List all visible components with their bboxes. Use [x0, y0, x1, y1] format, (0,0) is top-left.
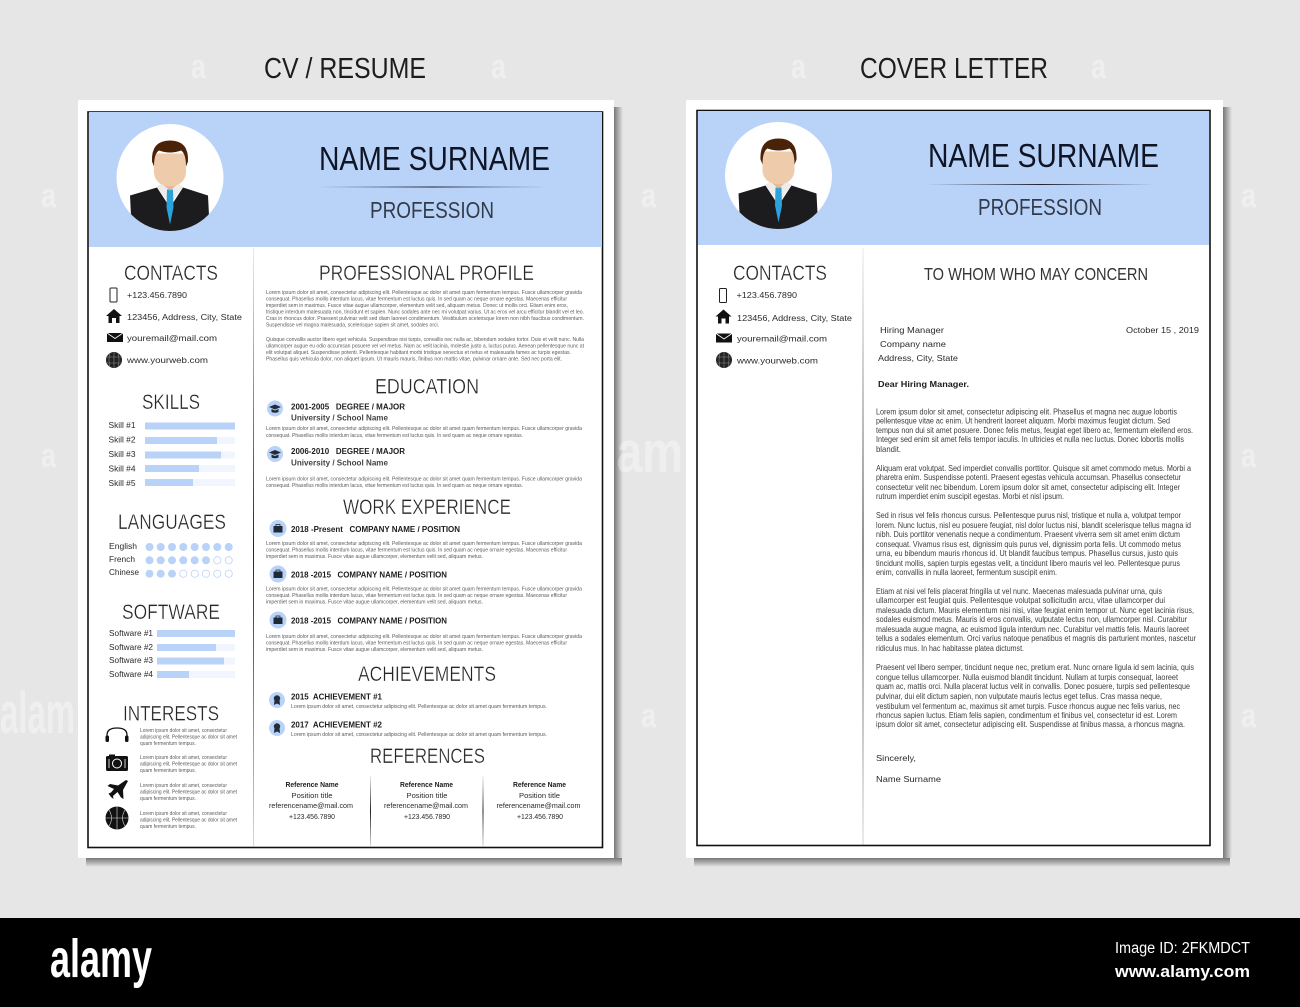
section: references: Position title — [292, 791, 332, 800]
interest descriptions: Lorem ipsum dolor sit amet, consectetur — [140, 755, 227, 761]
watermark: a — [1241, 437, 1257, 475]
section: professional profile: Cras in rhoncus dolor. Praesent pulvinar velit sed diam laoreet condimentum. Vestibulum scelerisque lorem non nibh faucibus condimentum. — [266, 316, 584, 322]
watermark: a — [41, 437, 57, 475]
section: references: Position title — [406, 791, 448, 800]
section: professional profile — [266, 262, 585, 362]
letter body: ullamcorper est feugiat quis. Pellentesque volutpat sollicitudin arcu, vitae ullamcorper dui — [876, 595, 1165, 605]
section: references: +123.456.7890 — [517, 812, 563, 821]
section: work experience: 2018 -2015 COMPANY NAME / POSITION — [291, 616, 447, 626]
interest descriptions: Lorem ipsum dolor sit amet, consectetur — [140, 811, 227, 817]
section: achievements: Lorem ipsum dolor sit amet, consectetur adipiscing elit. Pellentesque ac dolor sit amet quam fermentum tempus. — [291, 732, 547, 738]
section: achievements: 2017 ACHIEVEMENT #2 — [291, 720, 382, 730]
letter body: urna, eu bibendum mauris rhoncus id. Ut blandit faucibus tempus. Phasellus cursus, justo quis — [876, 548, 1179, 558]
sidebar: software: Software #3 — [109, 655, 153, 665]
letter body: malesuada dictum. Mauris elementum nisi nisi, vitae feugiat enim tempor ut. Nunc eget lacinia risus, — [876, 605, 1194, 615]
letter sign-off: Name Surname — [876, 774, 941, 784]
section: work experience: 2018 -Present COMPANY NAME / POSITION — [291, 524, 460, 534]
watermark: alam — [0, 681, 75, 746]
letter body: tellus a sodales elementum. Orci varius natoque penatibus et magnis dis parturient montes, nascetur — [876, 633, 1196, 643]
watermark: a — [191, 48, 207, 86]
section: work experience: imperdiet sem in maximus. Fusce vitae augue ullamcorper, elementum velit sed, aliquam metus. — [266, 554, 483, 560]
recipient address: Address, City, State — [878, 353, 958, 363]
section: education: consequat. Phasellus mollis interdum lacus, vitae fermentum est luctus quis. In sed quam ac neque ornare egestas. — [266, 483, 523, 489]
sidebar: skills: Skill #4 — [108, 464, 136, 474]
icon: airplane — [108, 780, 128, 799]
recipient address — [878, 325, 958, 363]
letter body: ridiculus mus. In hac habitasse platea dictumst. — [876, 643, 1024, 653]
letter body: Aliquam erat volutpat. Sed imperdiet convallis porttitor. Quisque sit amet commodo metus. Morbi a — [876, 463, 1191, 473]
sidebar: contacts: youremail@mail.com — [127, 333, 217, 343]
sidebar: contacts: www.yourweb.com — [126, 355, 208, 365]
letter body: Lorem ipsum dolor sit amet, consectetur adipiscing elit. Phasellus et magna nec augue lobortis — [876, 406, 1178, 416]
footer url: www.alamy.com — [1114, 962, 1250, 981]
section: work experience: 2018 -2015 COMPANY NAME / POSITION — [291, 570, 447, 580]
CV name: NAME SURNAME — [319, 140, 550, 177]
sidebar: software: Software #1 — [109, 628, 153, 638]
letter body: rutrum imperdiet enim suscipit egestas. Morbi et nisl ipsum. — [876, 491, 1064, 501]
section: achievements — [269, 663, 547, 738]
watermark: a — [1241, 177, 1257, 215]
sidebar: languages: Chinese — [109, 567, 139, 577]
letter body: lorem. Nunc luctus, nisl eu posuere feugiat, nisl dolor luctus nisi, blandit scelerisque tellus magna id — [876, 520, 1191, 530]
sidebar: software: SOFTWARE — [122, 601, 220, 624]
watermark: a — [1091, 48, 1107, 86]
letter contacts — [716, 262, 852, 368]
section: professional profile: imperdiet sem in maximus. Fusce vitae augue ullamcorper, elementum velit sed, aliquam metus. Donec ut mollis orci. Etiam enim eros, — [266, 303, 568, 309]
watermark: a — [641, 697, 657, 735]
section: work experience: imperdiet sem in maximus. Fusce vitae augue ullamcorper, elementum velit sed, aliquam metus. — [266, 647, 483, 653]
letter body: Praesent vel libero semper, tincidunt neque nec, pretium erat. Nunc ornare ligula id sem lacinia, quis — [876, 662, 1195, 672]
section: references: REFERENCES — [370, 745, 485, 768]
watermark: a — [641, 177, 657, 215]
section: education: University / School Name — [291, 458, 388, 468]
letter name: NAME SURNAME — [928, 137, 1159, 174]
letter contacts: www.yourweb.com — [736, 356, 818, 366]
letter body: rhoncus sapien luctus. Etiam felis sapien, condimentum et finibus vel, consectetur id est. Lorem — [876, 710, 1177, 720]
title: Cover Letter: COVER LETTER — [860, 53, 1048, 85]
letter body: Sed in risus vel felis rhoncus cursus. Pellentesque purus nisl, tristique et nulla a, volutpat tempor — [876, 510, 1181, 520]
letter contacts: youremail@mail.com — [737, 334, 827, 344]
letter body: consectetur velit nec bibendum. Lorem ipsum dolor sit amet, consectetur adipiscing elit. Integer — [876, 482, 1180, 492]
letter sign-off: Sincerely, — [876, 753, 916, 763]
sidebar: languages: French — [109, 554, 135, 564]
section: professional profile: elit volutpat aliquet. Suspendisse potenti. Pellentesque habitant morbi tristique senectus et netus et malesuada fames ac turpis egestas. — [266, 350, 571, 356]
watermark: a — [1241, 697, 1257, 735]
sidebar: software: Software #2 — [109, 642, 153, 652]
watermark — [0, 48, 1257, 746]
icon: camera — [106, 754, 128, 771]
sidebar: interests — [106, 702, 237, 830]
section: professional profile: Lorem ipsum dolor sit amet, consectetur adipiscing elit. Pellentesque ac dolor sit amet quam fermentum tempus. Fusce ullamcorper gravida — [266, 290, 582, 296]
section: work experience: consequat. Phasellus mollis interdum lacus, vitae fermentum est luctus quis. In sed quam ac neque ornare egestas. Maecenas efficitur — [266, 548, 567, 554]
section: professional profile: tristique interdum malesuada non, tincidunt et sapien. Nunc sodales ante nec mi volutpat varius. Ut ac eros vel arcu efficitur blandit vel et leo. — [266, 310, 584, 316]
interest descriptions: Lorem ipsum dolor sit amet, consectetur — [140, 728, 227, 734]
letter contacts: +123.456.7890 — [736, 290, 797, 300]
section: references: referencename@mail.com — [496, 801, 580, 810]
section: education: University / School Name — [291, 412, 388, 422]
section: achievements: ACHIEVEMENTS — [358, 663, 496, 686]
recipient address: Company name — [880, 339, 946, 349]
letter header band — [698, 111, 1209, 245]
section: education: consequat. Phasellus mollis interdum lacus, vitae fermentum est luctus quis. In sed quam ac neque ornare egestas. — [266, 433, 523, 439]
section: professional profile: consequat. Phasellus mollis interdum lacus, vitae fermentum est luctus quis. In sed quam ac neque ornare egestas. Maecenas efficitur — [266, 296, 567, 302]
letter contacts: CONTACTS — [733, 262, 827, 285]
section: achievements: Lorem ipsum dolor sit amet, consectetur adipiscing elit. Pellentesque ac dolor sit amet quam fermentum tempus. — [291, 704, 547, 710]
interest descriptions: quam fermentum tempus. — [140, 741, 196, 747]
section: references: Reference Name — [400, 780, 453, 789]
letter body: nibh. Duis porttitor venenatis neque a condimentum. Praesent viverra sem sit amet enim dictum — [876, 529, 1180, 539]
sidebar: software: Software #4 — [109, 669, 153, 679]
letter contacts: 123456, Address, City, State — [737, 313, 852, 323]
letter body: pellentesque vitae ac enim. Ut hendrerit laoreet aliquam. Morbi maximus feugiat dictum. Sed — [876, 416, 1170, 426]
letter body — [876, 406, 1196, 729]
section: education: 2001-2005 DEGREE / MAJOR — [291, 402, 406, 412]
section: references: +123.456.7890 — [404, 812, 450, 821]
interest descriptions — [140, 728, 237, 830]
recipient address: Hiring Manager — [880, 325, 944, 335]
section: work experience: consequat. Phasellus mollis interdum lacus, vitae fermentum est luctus quis. In sed quam ac neque ornare egestas. Maecenas efficitur — [266, 640, 567, 646]
letter body: Etiam at nisi vel felis placerat fringilla ut vel nunc. Maecenas malesuada pulvinar urna, quis — [876, 586, 1163, 596]
section: work experience: WORK EXPERIENCE — [343, 496, 511, 519]
watermark: a — [491, 48, 507, 86]
section: references: referencename@mail.com — [269, 801, 353, 810]
icon: headphones — [106, 728, 128, 742]
letter body: vestibulum vel fermentum ac, maximus sit amet turpis. Fusce rhoncus augue nec felis varius, nec — [876, 701, 1181, 711]
image id: Image ID: 2FKMDCT — [1115, 940, 1250, 957]
avatar — [116, 124, 224, 238]
letter body: ipsum dolor sit amet, consectetur adipiscing elit. Suspendisse at finibus massa, a rhoncus magna. — [876, 719, 1185, 729]
sidebar: skills: Skill #2 — [108, 434, 136, 444]
section: professional profile: PROFESSIONAL PROFILE — [319, 262, 534, 285]
interest descriptions: quam fermentum tempus. — [140, 824, 196, 830]
section: education: 2006-2010 DEGREE / MAJOR — [291, 446, 406, 456]
sidebar: interests: INTERESTS — [123, 702, 219, 726]
sidebar: software — [109, 601, 235, 679]
sidebar: languages: LANGUAGES — [118, 511, 226, 534]
section: work experience: imperdiet sem in maximus. Fusce vitae augue ullamcorper, elementum velit sed, aliquam metus. — [266, 600, 483, 606]
panel: CV page — [78, 100, 623, 867]
section: references: Position title — [519, 791, 560, 800]
sidebar: skills — [108, 391, 235, 488]
letter body: sodales euismod metus. Mauris id eros convallis, vulputate lectus non, ullamcorper nisl. Curabitur — [876, 614, 1187, 624]
panel: cover letter page — [686, 100, 1232, 867]
sidebar: skills: Skill #3 — [108, 449, 136, 459]
letter sign-off — [876, 753, 941, 784]
section: professional profile: ullamcorper augue eu odio accumsan posuere vel vel metus. Nam ac velit lacinia, molestie justo a, luctus purus. Aenean pellentesque nunc at — [266, 344, 585, 350]
sidebar: contacts: +123.456.7890 — [127, 290, 187, 300]
sidebar: skills: Skill #5 — [108, 478, 136, 488]
section: references: Reference Name — [513, 780, 566, 789]
avatar — [725, 122, 832, 236]
section: professional profile: Suspendisse vel magna malesuada, scelerisque sapien sit amet, sodales orci. — [266, 322, 439, 328]
interest descriptions: adipiscing elit. Pellentesque ac dolor sit amet — [140, 734, 237, 740]
sidebar: contacts: 123456, Address, City, State — [127, 312, 242, 322]
section: professional profile: Quisque convallis auctor libero eget vehicula. Suspendisse nisi turpis, convallis nec nulla ac, bibendum sodales tortor. Duis et velit nunc. Nulla — [266, 337, 584, 343]
sidebar: skills: SKILLS — [142, 391, 200, 414]
letter body: Integer sed enim sit amet felis tempor iaculis. In ultricies et nulla nec luctus. Donec lobortis mollis — [876, 434, 1185, 444]
interest descriptions: Lorem ipsum dolor sit amet, consectetur — [140, 783, 227, 789]
sidebar: contacts: CONTACTS — [124, 262, 218, 285]
letter body: enim, convallis in nulla laoreet, fermentum suscipit enim. — [876, 567, 1057, 577]
watermark: a — [41, 177, 57, 215]
letter body: pulvinar, dui elit dictum sapien, non vulputate mauris lectus eget tellus. Cras massa neque, — [876, 691, 1162, 701]
section: education: Lorem ipsum dolor sit amet, consectetur adipiscing elit. Pellentesque ac dolor sit amet quam fermentum tempus. Fusce ullamcorper gravida — [266, 426, 582, 432]
footer logo: alamy — [50, 929, 152, 989]
section: work experience: Lorem ipsum dolor sit amet, consectetur adipiscing elit. Pellentesque ac dolor sit amet quam fermentum tempus. Fusce ullamcorper gravida — [266, 586, 582, 592]
section: education: EDUCATION — [375, 375, 479, 398]
letter body: pharetra enim. Suspendisse potenti. Praesent egestas vehicula accumsan. Phasellus consectetur — [876, 472, 1181, 482]
letter date: October 15 , 2019 — [1126, 325, 1199, 335]
interest descriptions: adipiscing elit. Pellentesque ac dolor sit amet — [140, 762, 237, 768]
section: references: +123.456.7890 — [289, 812, 335, 821]
letter body: congue tellus ullamcorper. Nulla euismod blandit tincidunt. Nullam at turpis consequat, laoreet — [876, 672, 1178, 682]
interest descriptions: adipiscing elit. Pellentesque ac dolor sit amet — [140, 818, 237, 824]
letter body: blandit. — [876, 444, 901, 454]
letter body: tempus non dui sit amet posuere. Donec felis metus, feugiat eget libero ac, fermentum eleifend eros. — [876, 425, 1193, 435]
sidebar: languages: English — [109, 541, 137, 551]
letter body: quam ac, mattis orci. Nulla placerat luctus velit in convallis. Donec posuere, turpis sed pellentesque — [876, 681, 1190, 691]
watermark: a — [791, 48, 807, 86]
interest descriptions: adipiscing elit. Pellentesque ac dolor sit amet — [140, 790, 237, 796]
letter body: consequat. Vivamus risus est, dignissim quis purus vel, dignissim porta felis. Ut commodo metus — [876, 539, 1182, 549]
CV profession: PROFESSION — [370, 197, 494, 223]
section: work experience: Lorem ipsum dolor sit amet, consectetur adipiscing elit. Pellentesque ac dolor sit amet quam fermentum tempus. Fusce ullamcorper gravida — [266, 634, 582, 640]
letter body: malesuada augue magna, ac euismod ligula interdum nec. Curabitur vel mattis felis. Mauris laoreet — [876, 624, 1189, 634]
greeting: Dear Hiring Manager. — [878, 379, 969, 389]
section: work experience: Lorem ipsum dolor sit amet, consectetur adipiscing elit. Pellentesque ac dolor sit amet quam fermentum tempus. Fusce ullamcorper gravida — [266, 541, 582, 547]
section: achievements: 2015 ACHIEVEMENT #1 — [291, 692, 382, 702]
title: CV / Resume: CV / RESUME — [264, 53, 426, 85]
sidebar: languages — [109, 511, 233, 578]
section: references — [269, 745, 580, 846]
section: professional profile: Phasellus quis vehicula dolor, non aliquet ipsum. Ut mauris mauris, finibus non mattis vitae, pulvinar ornare ante. Sed nec porta elit. — [266, 356, 562, 362]
section: work experience — [266, 496, 582, 653]
letter salutation heading: TO WHOM WHO MAY CONCERN — [924, 264, 1148, 284]
section: references: Reference Name — [286, 780, 338, 789]
letter profession: PROFESSION — [978, 194, 1102, 220]
footer bar — [0, 918, 1300, 1007]
interest descriptions: quam fermentum tempus. — [140, 768, 196, 774]
section: education — [266, 375, 582, 489]
section: work experience: consequat. Phasellus mollis interdum lacus, vitae fermentum est luctus quis. In sed quam ac neque ornare egestas. Maecenas efficitur — [266, 593, 567, 599]
sidebar: skills: Skill #1 — [108, 420, 136, 430]
sidebar: contacts — [106, 262, 242, 368]
watermark: lam — [604, 420, 683, 485]
section: education: Lorem ipsum dolor sit amet, consectetur adipiscing elit. Pellentesque ac dolor sit amet quam fermentum tempus. Fusce ullamcorper gravida — [266, 476, 582, 482]
icon: basketball — [106, 806, 128, 830]
section: references: referencename@mail.com — [384, 801, 468, 810]
letter body: tincidunt mollis, sapien turpis egestas velit, a tincidunt libero mauris vel leo. Pellentesque purus — [876, 558, 1181, 568]
CV header band — [89, 112, 602, 247]
interest descriptions: quam fermentum tempus. — [140, 796, 196, 802]
